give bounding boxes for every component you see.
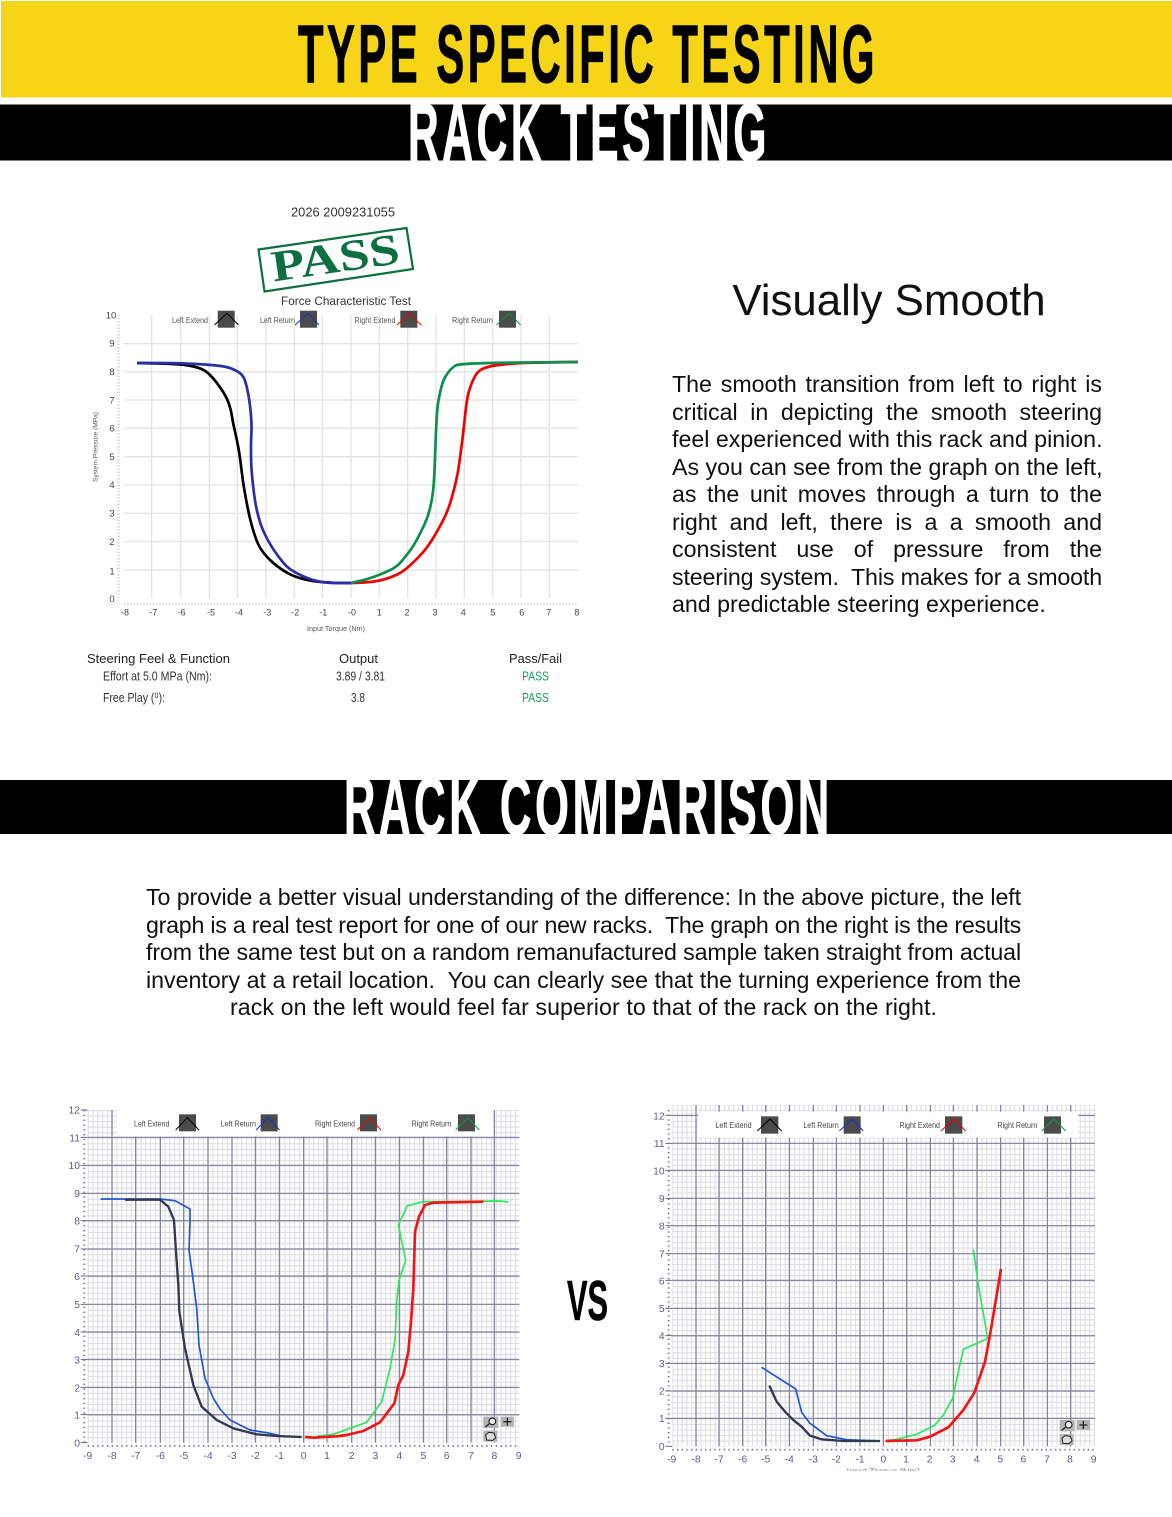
y axis labels: 6 <box>109 424 115 434</box>
y axis labels: 5 <box>109 452 115 463</box>
results table <box>87 651 562 705</box>
x axis labels: -7 <box>131 1451 141 1462</box>
x axis labels: -2 <box>291 608 299 618</box>
y axis labels: 3 <box>74 1355 80 1366</box>
axis ticks <box>669 1110 1095 1450</box>
curve: right return (green) <box>317 1201 508 1436</box>
text block: smooth steering description <box>672 371 1103 617</box>
x axis labels: 3 <box>950 1454 956 1465</box>
chart: new rack test graph <box>68 1106 522 1462</box>
text block: smooth steering description: steering system. This makes for a smooth <box>672 564 1102 590</box>
x axis labels: 1 <box>903 1454 909 1465</box>
x axis title: Input Torque (Nm) <box>307 626 365 633</box>
curve: right extend (red) <box>351 362 578 583</box>
x axis labels: -3 <box>227 1451 237 1462</box>
curve: left extend (black) <box>769 1386 880 1441</box>
x axis labels <box>667 1454 1097 1465</box>
x axis labels: 6 <box>444 1451 450 1462</box>
y axis labels: 9 <box>659 1194 665 1205</box>
y axis labels: 0 <box>109 594 115 605</box>
x axis labels: -5 <box>179 1451 189 1462</box>
x axis labels: -2 <box>251 1451 260 1462</box>
major grid <box>672 1105 1095 1446</box>
y axis labels: 10 <box>106 310 116 322</box>
minor grid <box>88 1110 519 1443</box>
minor grid <box>672 1105 1095 1446</box>
text block: smooth steering description: critical in depicting the smooth steering <box>672 398 1102 424</box>
x axis labels: 5 <box>997 1454 1003 1465</box>
curve: left return (blue) <box>101 1199 302 1437</box>
y axis labels: 11 <box>654 1139 665 1150</box>
text block: comparison explanation: graph is a real test report for one of our new racks. The graph on the right is the results <box>146 912 1021 938</box>
y axis labels: 2 <box>109 537 115 548</box>
x axis labels: -6 <box>178 608 186 618</box>
results table: 3.8 <box>351 691 365 705</box>
x axis labels: 7 <box>468 1451 474 1462</box>
x axis labels: 7 <box>546 608 551 618</box>
x axis labels: 5 <box>490 608 495 618</box>
text block: smooth steering description: right and left, there is a a smooth and <box>672 508 1102 534</box>
report serial number: 2026 2009231055 <box>291 206 395 220</box>
y axis labels: 4 <box>659 1332 665 1343</box>
y axis labels: 4 <box>74 1328 80 1339</box>
y axis labels: 7 <box>74 1244 80 1255</box>
legend <box>715 1116 1066 1134</box>
y axis labels: 4 <box>109 480 115 491</box>
x axis labels: 4 <box>974 1454 980 1465</box>
y axis labels: 2 <box>74 1383 80 1394</box>
x axis labels: 2 <box>404 608 410 618</box>
x axis labels: 8 <box>574 608 579 618</box>
test report chart panel <box>87 206 579 705</box>
x axis labels: -8 <box>691 1454 701 1465</box>
legend: Right Extend <box>315 1118 355 1128</box>
text block: comparison explanation: To provide a better visual understanding of the difference: In the above picture, the left <box>146 884 1021 910</box>
x axis labels: -1 <box>319 608 327 618</box>
legend: Left Extend <box>134 1118 170 1128</box>
x axis labels: -6 <box>156 1451 165 1462</box>
x axis labels: -7 <box>149 608 157 618</box>
legend: Left Return <box>260 315 295 325</box>
x axis labels: -9 <box>83 1451 93 1462</box>
grid lines <box>124 315 578 598</box>
legend: Right Extend <box>354 315 396 325</box>
x axis labels: 9 <box>516 1451 522 1462</box>
curve: left extend (black) <box>137 363 351 583</box>
x axis labels: 4 <box>461 608 466 618</box>
x axis labels <box>83 1451 522 1462</box>
x axis labels: 3 <box>432 608 438 618</box>
y axis labels: 1 <box>74 1411 80 1422</box>
text block: comparison explanation <box>146 884 1021 1020</box>
legend: Left Extend <box>715 1120 752 1130</box>
y axis labels: 12 <box>68 1106 80 1117</box>
title banner: Type Specific Testing <box>1 1 1172 98</box>
x axis labels: 0 <box>301 1451 307 1462</box>
y axis labels: 5 <box>74 1300 80 1311</box>
x axis labels: 4 <box>396 1451 402 1462</box>
y axis labels: 0 <box>74 1439 80 1450</box>
x axis labels: -5 <box>207 608 215 618</box>
results table: Free Play (⁰): <box>103 691 165 705</box>
x axis labels: 2 <box>927 1454 933 1465</box>
x axis labels: 1 <box>324 1451 330 1462</box>
legend: Right Extend <box>899 1120 940 1130</box>
y axis title: System Pressure (MPa) <box>92 412 100 482</box>
x axis labels: 8 <box>1067 1454 1073 1465</box>
PASS stamp: PASS <box>268 224 403 291</box>
text block: smooth steering description: feel experienced with this rack and pinion. <box>672 426 1103 452</box>
x axis labels: 7 <box>1044 1454 1050 1465</box>
curve: right return (green) <box>351 362 578 583</box>
results table: Output <box>339 651 378 666</box>
x axis labels: -5 <box>761 1454 771 1465</box>
curve: left return (blue) <box>137 363 351 583</box>
x axis labels: -1 <box>855 1454 865 1465</box>
section banner: Rack Testing <box>0 100 1172 164</box>
axis ticks <box>118 315 578 604</box>
x axis labels: 9 <box>1091 1454 1097 1465</box>
results table: Pass/Fail <box>509 651 562 666</box>
text block: smooth steering description: As you can see from the graph on the left, <box>672 454 1103 480</box>
text block: comparison explanation: rack on the left would feel far superior to that of the rack on the right. <box>230 994 937 1020</box>
y axis labels: 7 <box>109 396 115 406</box>
y axis labels <box>68 1106 80 1450</box>
y axis labels: 12 <box>653 1111 665 1122</box>
y axis labels: 3 <box>659 1359 665 1370</box>
y axis labels <box>653 1111 665 1453</box>
x axis labels: 8 <box>491 1451 497 1462</box>
x axis labels: 1 <box>377 608 382 618</box>
y axis labels: 8 <box>74 1217 80 1228</box>
x axis labels: 3 <box>372 1451 378 1462</box>
zoom and pan tool icons <box>1060 1420 1090 1445</box>
x axis labels: -1 <box>275 1451 284 1462</box>
legend background <box>117 1109 493 1136</box>
x axis labels: -4 <box>785 1454 794 1465</box>
y axis labels <box>106 310 116 605</box>
legend: Right Return <box>452 315 493 325</box>
results table: Steering Feel & Function <box>87 651 230 666</box>
legend: Left Extend <box>172 315 208 325</box>
x axis labels: -3 <box>809 1454 818 1465</box>
x axis labels <box>121 608 579 618</box>
y axis labels: 2 <box>659 1387 665 1398</box>
x axis labels: 0 <box>880 1454 886 1465</box>
x axis labels: 5 <box>420 1451 426 1462</box>
y axis labels: 10 <box>68 1161 80 1172</box>
y axis labels: 6 <box>74 1272 80 1283</box>
x axis labels: -0 <box>348 608 356 618</box>
x axis labels: 6 <box>1020 1454 1026 1465</box>
x axis labels: -9 <box>667 1454 677 1465</box>
PASS stamp <box>258 224 413 292</box>
curve: left return (blue) <box>762 1367 880 1441</box>
legend <box>134 1114 479 1131</box>
x axis labels: -4 <box>203 1451 213 1462</box>
x axis labels: -8 <box>107 1451 117 1462</box>
major grid <box>88 1110 519 1443</box>
curve: left extend (black) <box>125 1200 302 1437</box>
cut-off x axis title: Input Torque (Nm) <box>847 1466 920 1475</box>
x axis labels: -4 <box>235 608 243 618</box>
text block: comparison explanation: inventory at a retail location. You can clearly see that the turning experience from the <box>146 966 1021 992</box>
text block: smooth steering description: The smooth transition from left to right is <box>672 371 1102 397</box>
y axis labels: 5 <box>659 1304 665 1315</box>
y axis labels: 10 <box>653 1166 665 1177</box>
x axis labels: 6 <box>519 608 524 618</box>
legend background <box>698 1112 1078 1138</box>
curve: right return (green) <box>885 1249 988 1441</box>
y axis labels: 0 <box>659 1442 665 1453</box>
chart title: Force Characteristic Test <box>281 294 412 308</box>
x axis labels: -6 <box>738 1454 748 1465</box>
legend: Right Return <box>997 1120 1038 1130</box>
results table: PASS <box>522 670 549 684</box>
x axis labels: -2 <box>832 1454 841 1465</box>
x axis labels: 2 <box>349 1451 355 1462</box>
results table: Effort at 5.0 MPa (Nm): <box>103 670 212 684</box>
text block: smooth steering description: and predictable steering experience. <box>672 591 1046 617</box>
x axis labels: -8 <box>121 608 129 618</box>
top ticks <box>719 1105 1071 1112</box>
y axis labels: 8 <box>109 367 115 378</box>
y axis labels: 11 <box>69 1133 80 1144</box>
results table: 3.89 / 3.81 <box>336 670 385 684</box>
y axis labels: 6 <box>659 1276 665 1287</box>
y axis labels: 1 <box>659 1414 665 1425</box>
chart: remanufactured rack test graph <box>653 1105 1097 1475</box>
x axis labels: -3 <box>263 608 271 618</box>
legend: Left Return <box>803 1120 839 1130</box>
legend: Right Return <box>412 1118 452 1128</box>
curve: right extend (red) <box>305 1202 483 1438</box>
legend <box>172 311 520 328</box>
results table: PASS <box>522 691 549 705</box>
text block: smooth steering description: consistent use of pressure from the <box>672 536 1102 562</box>
legend: Left Return <box>221 1118 256 1128</box>
x axis labels: -7 <box>714 1454 724 1465</box>
y axis labels: 9 <box>109 338 115 350</box>
axis ticks <box>84 1110 519 1446</box>
zoom and pan tool icons <box>483 1417 514 1442</box>
curve: right extend (red) <box>886 1269 1001 1441</box>
y axis labels: 9 <box>74 1189 80 1200</box>
y axis labels: 7 <box>659 1249 665 1260</box>
heading: Visually Smooth: Visually Smooth <box>732 276 1046 325</box>
y axis labels: 8 <box>659 1222 665 1233</box>
y axis labels: 1 <box>109 566 115 578</box>
y axis labels: 3 <box>109 508 115 520</box>
text block: comparison explanation: from the same test but on a random remanufactured sample taken straight from actual <box>146 939 1021 965</box>
text block: smooth steering description: as the unit moves through a turn to the <box>672 481 1102 507</box>
